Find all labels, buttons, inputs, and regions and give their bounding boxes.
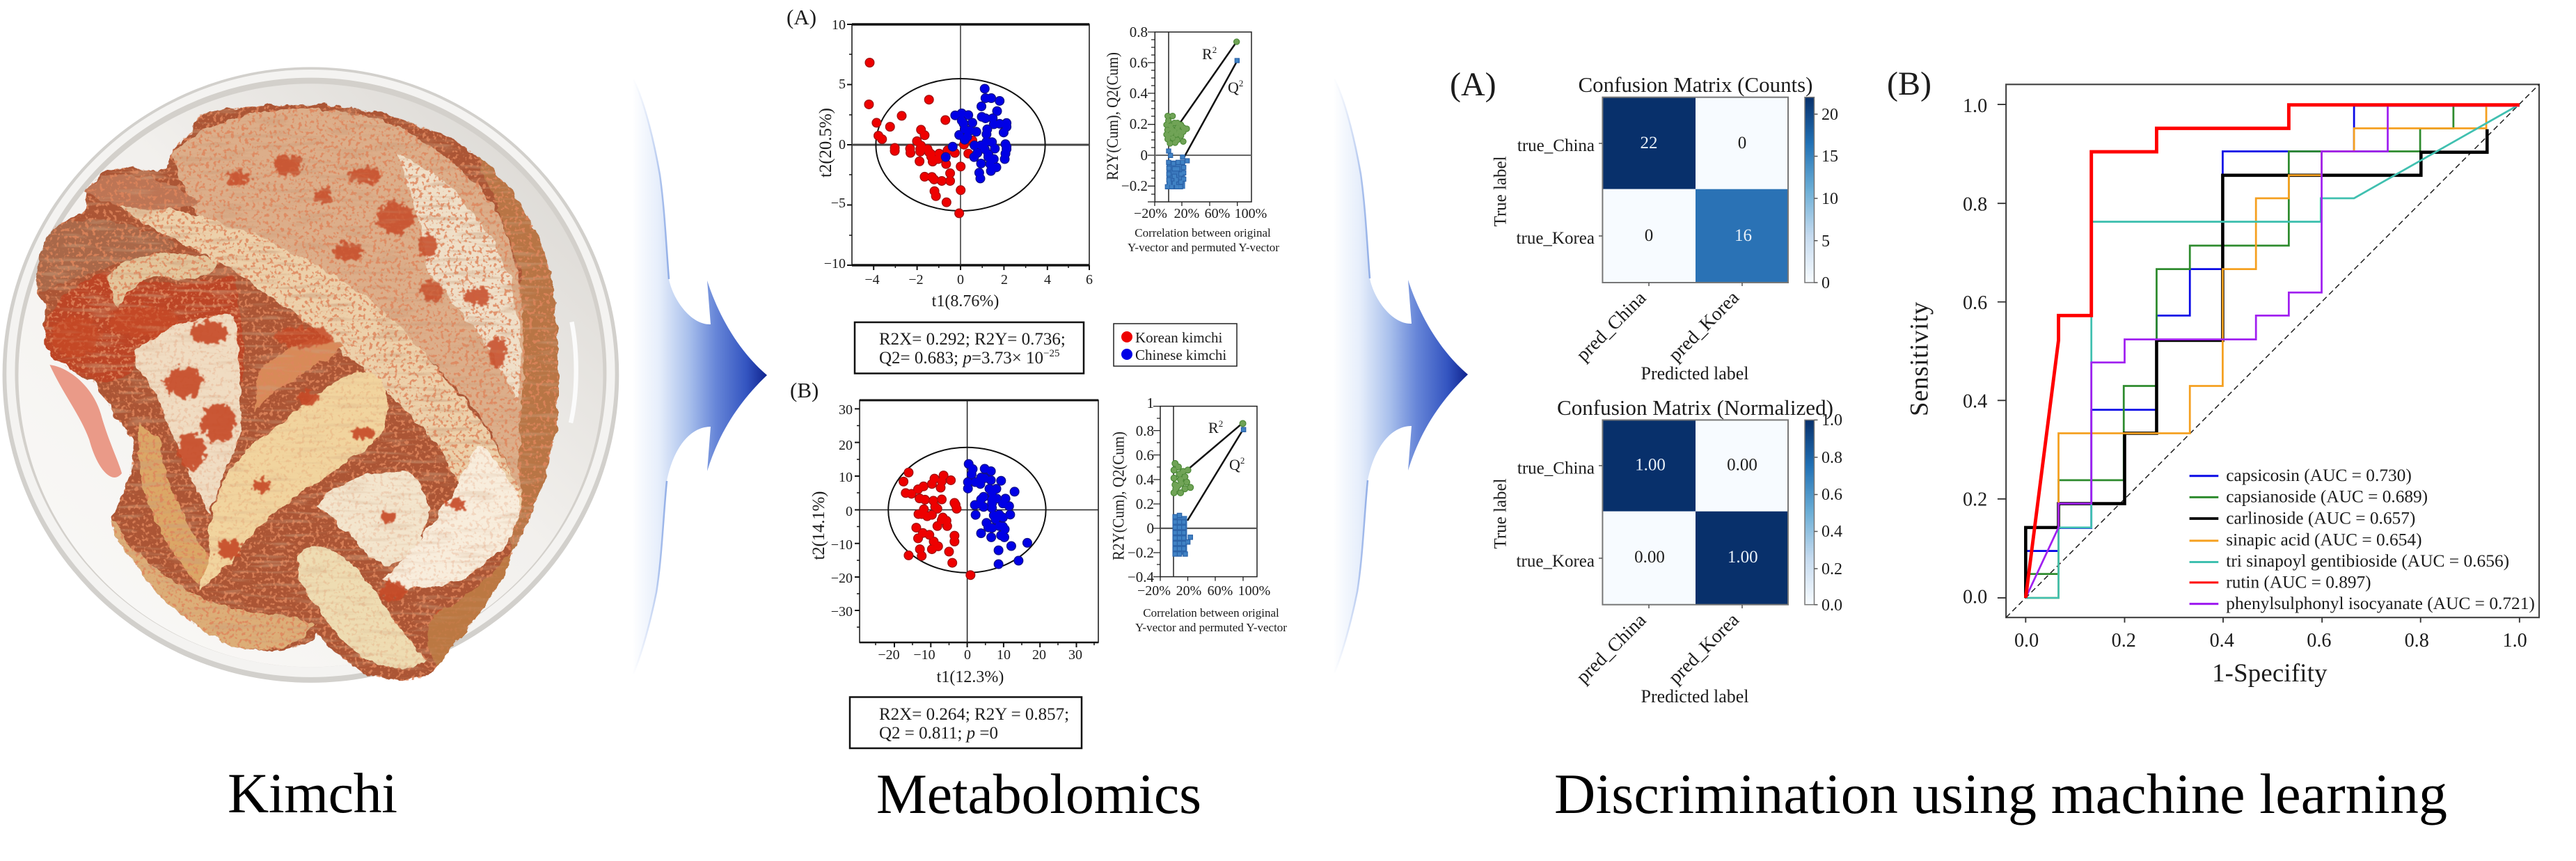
column labels bbox=[1572, 286, 1743, 365]
axis tick labels: 0.2 bbox=[2112, 630, 2136, 651]
axis tick labels: 0.6 bbox=[2307, 630, 2331, 651]
axis tick labels: 0.8 bbox=[1136, 422, 1154, 439]
legend: tri sinapoyl gentibioside (AUC = 0.656) bbox=[2226, 551, 2509, 571]
matrix cells: 22 bbox=[1640, 134, 1658, 152]
axis tick labels: 1 bbox=[1147, 395, 1154, 411]
x axis caption: Y-vector and permuted Y-vector bbox=[1128, 241, 1279, 254]
colour bar: 5 bbox=[1822, 232, 1830, 251]
chart: permutation test A bbox=[1104, 24, 1279, 254]
axis tick labels: 4 bbox=[1044, 272, 1051, 287]
axis tick labels: 0 bbox=[839, 137, 846, 152]
axis tick labels: 20% bbox=[1176, 583, 1201, 599]
chart title: Confusion Matrix (Counts) bbox=[1579, 72, 1812, 97]
chart: OPLS-DA score plot A bbox=[816, 17, 1093, 310]
axis tick labels bbox=[1128, 395, 1270, 599]
leaf vein and spice texture bbox=[30, 100, 567, 690]
y axis title: t2(14.1%) bbox=[809, 491, 828, 560]
axis tick labels: −20 bbox=[831, 571, 853, 586]
x axis caption: Correlation between original bbox=[1143, 606, 1279, 619]
axis tick labels: 0 bbox=[1147, 520, 1154, 537]
colour bar bbox=[1805, 411, 1842, 615]
axis tick labels: 0.2 bbox=[1963, 489, 1987, 511]
axis tick labels: −20 bbox=[878, 647, 900, 663]
matrix cells: 0.00 bbox=[1634, 548, 1665, 567]
axis tick labels: 0.6 bbox=[1130, 54, 1148, 71]
axis tick labels: 6 bbox=[1086, 272, 1093, 287]
matrix cells: 16 bbox=[1735, 226, 1752, 245]
axis tick labels bbox=[824, 17, 1093, 287]
stats box A bbox=[855, 322, 1084, 373]
legend marker: Korean kimchi bbox=[1121, 331, 1132, 342]
row labels bbox=[1517, 459, 1595, 571]
chart: permutation test A: Q bbox=[1228, 79, 1239, 96]
axis tick labels: 10 bbox=[839, 470, 853, 485]
matrix cells: 1.00 bbox=[1728, 548, 1758, 567]
axis tick labels: −0.2 bbox=[1121, 177, 1148, 194]
x axis title: t1(8.76%) bbox=[932, 292, 999, 310]
legend: sinapic acid (AUC = 0.654) bbox=[2226, 530, 2422, 550]
chart title: Confusion Matrix (Normalized) bbox=[1557, 395, 1833, 420]
axis tick labels: 60% bbox=[1205, 206, 1230, 221]
row labels: true_Korea bbox=[1517, 229, 1595, 248]
permuted R2 points bbox=[1174, 423, 1243, 493]
colour bar: 15 bbox=[1822, 148, 1838, 166]
x axis title: Predicted label bbox=[1641, 686, 1748, 706]
axis tick labels: 100% bbox=[1238, 583, 1270, 599]
axis tick labels: 20% bbox=[1174, 206, 1199, 221]
R2 and Q2 labels: 2 bbox=[1219, 418, 1223, 429]
colour bar: 10 bbox=[1822, 190, 1838, 208]
chart: permutation test A: 2 bbox=[1239, 78, 1243, 88]
curve: sinapic acid bbox=[2025, 106, 2520, 598]
row labels: true_China bbox=[1517, 136, 1595, 155]
x axis title: 1-Specifity bbox=[2212, 658, 2328, 687]
matrix cells: 0.00 bbox=[1727, 455, 1757, 474]
y axis title: True label bbox=[1491, 478, 1510, 549]
stats box B bbox=[850, 697, 1082, 748]
chart: ROC curves bbox=[1904, 84, 2539, 687]
permuted Q2 points bbox=[1167, 61, 1237, 189]
axis tick labels: −10 bbox=[824, 256, 846, 271]
axis tick labels: 0 bbox=[846, 504, 853, 519]
column labels: pred_Korea bbox=[1664, 286, 1743, 365]
matrix cells: 1.00 bbox=[1635, 455, 1666, 474]
axis tick labels: 10 bbox=[832, 17, 846, 33]
legend bbox=[2190, 465, 2535, 613]
axis tick labels: 30 bbox=[1068, 647, 1082, 663]
axis tick labels: 60% bbox=[1208, 583, 1233, 599]
column labels: pred_Korea bbox=[1664, 608, 1743, 688]
matrix cells: 0 bbox=[1738, 134, 1746, 152]
y axis title: t2(20.5%) bbox=[816, 108, 835, 177]
chart: confusion matrix normalized bbox=[1491, 395, 1842, 706]
axis tick labels: 30 bbox=[839, 402, 853, 418]
axis tick labels: −0.4 bbox=[1128, 569, 1154, 585]
legend: capsianoside (AUC = 0.689) bbox=[2226, 487, 2428, 507]
axis tick labels: −2 bbox=[908, 272, 924, 287]
column labels: pred_China bbox=[1572, 287, 1650, 365]
axis tick labels: −5 bbox=[831, 196, 846, 211]
kimchi back leaves bbox=[37, 105, 558, 681]
axis tick labels: 20 bbox=[839, 438, 853, 453]
curve: rutin bbox=[2025, 105, 2520, 598]
scatter points: Chinese kimchi bbox=[968, 464, 1027, 564]
axis tick labels: 0 bbox=[964, 647, 971, 663]
light texture over pale stems bbox=[30, 100, 567, 690]
legend: sample groups: Chinese kimchi bbox=[1135, 347, 1226, 363]
axis tick labels: 0.8 bbox=[1130, 24, 1148, 40]
kimchi pale stems bbox=[134, 316, 520, 668]
heading: panel label B, machine learning: (B) bbox=[1887, 65, 1931, 102]
y axis title: True label bbox=[1491, 156, 1510, 227]
axis tick labels: −30 bbox=[831, 604, 853, 619]
column labels bbox=[1572, 608, 1743, 688]
stats box A: R2X= 0.292; R2Y= 0.736; bbox=[879, 330, 1066, 349]
chart: permutation test B: 2 bbox=[1240, 455, 1244, 466]
legend: carlinoside (AUC = 0.657) bbox=[2226, 507, 2415, 528]
column labels: pred_China bbox=[1572, 609, 1650, 688]
legend: sample groups: Korean kimchi bbox=[1135, 329, 1223, 346]
axis tick labels: 10 bbox=[997, 647, 1011, 663]
scatter points: Korean kimchi bbox=[903, 473, 970, 575]
axis tick labels: 0 bbox=[1140, 147, 1148, 164]
row labels: true_China bbox=[1517, 459, 1595, 477]
colour bar: 0 bbox=[1822, 274, 1830, 292]
chart: permutation test B: Q bbox=[1229, 456, 1240, 473]
colour bar: 1.0 bbox=[1822, 411, 1842, 429]
stats box A: −25 bbox=[1043, 348, 1060, 359]
arrow: metabolomics to machine learning bbox=[1334, 79, 1468, 673]
x axis title: Predicted label bbox=[1641, 363, 1748, 384]
heading: panel label B, metabolomics: (B) bbox=[790, 378, 819, 402]
sauce on pale stems bbox=[165, 321, 467, 601]
colour bar: 0.4 bbox=[1822, 523, 1842, 541]
legend marker: Chinese kimchi bbox=[1121, 349, 1132, 360]
axis tick labels: 0.2 bbox=[1136, 496, 1154, 512]
x axis caption: Y-vector and permuted Y-vector bbox=[1135, 621, 1287, 634]
matrix cells bbox=[1599, 420, 1788, 608]
legend: sample groups bbox=[1114, 324, 1237, 366]
scatter points: Korean kimchi bbox=[869, 63, 972, 213]
axis tick labels: 0.4 bbox=[1136, 471, 1154, 488]
curve: tri sinapoyl gentibioside bbox=[2025, 104, 2520, 598]
scatter points: Chinese kimchi bbox=[946, 88, 1006, 178]
y axis title: R2Y(Cum), Q2(Cum) bbox=[1104, 52, 1121, 180]
permuted Q2 points bbox=[1173, 429, 1244, 555]
colour bar: 0.6 bbox=[1822, 486, 1842, 504]
curve: phenylsulphonyl isocyanate bbox=[2025, 106, 2520, 598]
curve: carlinoside bbox=[2025, 129, 2487, 598]
chart: permutation test B bbox=[1109, 395, 1287, 634]
y axis title: R2Y(Cum), Q2(Cum) bbox=[1109, 432, 1128, 560]
axis tick labels: 0.4 bbox=[1963, 391, 1987, 413]
axis tick labels: −4 bbox=[864, 272, 880, 287]
axis tick labels: 100% bbox=[1235, 206, 1267, 221]
permuted R2 points bbox=[1167, 42, 1237, 143]
axis tick labels: −0.2 bbox=[1128, 544, 1154, 561]
illustration: bowl of kimchi bbox=[3, 67, 619, 690]
axis tick labels: 0 bbox=[957, 272, 964, 287]
heading: panel label A, machine learning: (A) bbox=[1450, 66, 1496, 103]
x axis caption: Correlation between original bbox=[1135, 226, 1271, 239]
axis tick labels: 0.0 bbox=[2014, 630, 2039, 651]
axis tick labels: 0.6 bbox=[1963, 292, 1987, 314]
axis tick labels: 5 bbox=[839, 77, 846, 92]
axis tick labels bbox=[831, 402, 1082, 663]
row labels: true_Korea bbox=[1517, 552, 1595, 571]
axis tick labels bbox=[1121, 24, 1267, 221]
axis tick labels: 1.0 bbox=[2502, 630, 2527, 651]
section title: Metabolomics: Metabolomics bbox=[876, 762, 1201, 826]
matrix cells: 0 bbox=[1645, 226, 1653, 245]
y axis title: Sensitivity bbox=[1904, 301, 1933, 416]
colour bar: 20 bbox=[1822, 106, 1838, 124]
chart: OPLS-DA score plot B bbox=[809, 400, 1098, 686]
axis tick labels: −10 bbox=[913, 647, 935, 663]
R2 and Q2 labels: R bbox=[1202, 45, 1212, 63]
legend: phenylsulphonyl isocyanate (AUC = 0.721) bbox=[2226, 593, 2535, 613]
stats box B: R2X= 0.264; R2Y = 0.857; bbox=[879, 705, 1069, 724]
axis tick labels: 2 bbox=[1001, 272, 1008, 287]
axis tick labels: 0.8 bbox=[2405, 630, 2429, 651]
legend: capsicosin (AUC = 0.730) bbox=[2226, 465, 2412, 485]
legend: rutin (AUC = 0.897) bbox=[2226, 571, 2371, 592]
stats box A: Q2= 0.683; p=3.73× 10 bbox=[879, 349, 1043, 368]
curve: capsianoside bbox=[2025, 106, 2520, 598]
axis tick labels: 0.6 bbox=[1136, 447, 1154, 464]
axis tick labels: −20% bbox=[1134, 206, 1167, 221]
axis tick labels: 20 bbox=[1032, 647, 1046, 663]
axis tick labels: 0.4 bbox=[2210, 630, 2234, 651]
axis tick labels: −10 bbox=[831, 537, 853, 553]
curve: capsicosin bbox=[2025, 106, 2520, 598]
colour bar: 0.8 bbox=[1822, 449, 1842, 467]
matrix cells bbox=[1599, 97, 1788, 286]
axis tick labels: 0.4 bbox=[1130, 85, 1148, 102]
axis tick labels: −20% bbox=[1137, 583, 1171, 599]
axis tick labels: 0.2 bbox=[1130, 116, 1148, 132]
sauce puddle bbox=[49, 365, 122, 477]
stats box B: Q2 = 0.811; p =0 bbox=[879, 724, 998, 743]
R2 and Q2 regression lines bbox=[1180, 42, 1238, 157]
row labels bbox=[1517, 136, 1595, 248]
section title: Kimchi: Kimchi bbox=[228, 761, 397, 825]
colour bar: 0.0 bbox=[1822, 597, 1842, 615]
axis tick labels: 0.8 bbox=[1963, 194, 1987, 216]
x axis title: t1(12.3%) bbox=[937, 668, 1004, 686]
heading: panel label A, metabolomics: (A) bbox=[787, 5, 816, 29]
R2 and Q2 regression lines bbox=[1187, 423, 1243, 521]
axis tick labels bbox=[1963, 95, 2527, 651]
colour bar bbox=[1805, 97, 1838, 292]
chart: confusion matrix counts bbox=[1491, 72, 1838, 384]
axis tick labels: 1.0 bbox=[1963, 95, 1987, 117]
colour bar: 0.2 bbox=[1822, 560, 1842, 578]
axis tick labels: 0.0 bbox=[1963, 586, 1987, 608]
plate bbox=[3, 67, 619, 683]
section title: Discrimination using machine learning: Discrimination using machine learning bbox=[1554, 762, 2447, 826]
R2 and Q2 labels: 2 bbox=[1212, 45, 1217, 55]
arrow: kimchi to metabolomics bbox=[633, 79, 767, 674]
R2 and Q2 labels: R bbox=[1208, 419, 1219, 436]
chilli sauce blotches bbox=[49, 155, 507, 625]
